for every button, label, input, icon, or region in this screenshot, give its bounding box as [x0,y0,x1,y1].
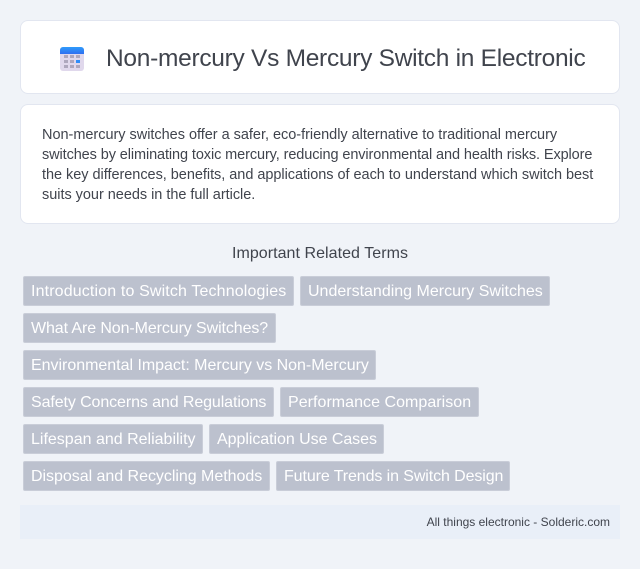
footer credit: All things electronic - Solderic.com [427,515,610,529]
tag: Understanding Mercury Switches [308,283,543,300]
tag [23,313,276,343]
tag: Environmental Impact: Mercury vs Non-Mercury [31,357,369,374]
tag: What Are Non-Mercury Switches? [31,320,268,337]
tag: Safety Concerns and Regulations [31,394,266,411]
tag: Introduction to Switch Technologies [31,283,286,300]
tag [280,387,479,417]
tag [23,350,376,380]
tag [23,424,203,454]
heading: related terms: Important Related Terms [232,245,408,262]
panel: related term tags [23,276,550,491]
tag [276,461,510,491]
title: Non-mercury Vs Mercury Switch in Electronic [106,45,585,72]
panel: title card [20,20,620,94]
tag: Application Use Cases [217,431,377,448]
tag: Disposal and Recycling Methods [31,468,262,485]
intro paragraph: switches by eliminating toxic mercury, reducing environmental and health risks. Explore [42,147,592,163]
intro paragraph: Non-mercury switches offer a safer, eco-friendly alternative to traditional mercury [42,127,557,143]
tag: Future Trends in Switch Design [284,468,503,485]
intro paragraph [42,127,594,203]
footer [20,505,620,539]
intro paragraph: the key differences, benefits, and applications of each to understand which switch best [42,167,593,183]
tag [209,424,384,454]
tag [23,461,270,491]
tag [23,276,294,306]
icon: calendar [60,47,84,71]
tag: Performance Comparison [288,394,471,411]
tag [300,276,550,306]
tag [23,387,274,417]
panel: intro text [20,104,620,224]
tag: Lifespan and Reliability [31,431,196,448]
intro paragraph: suits your needs in the full article. [42,187,255,203]
